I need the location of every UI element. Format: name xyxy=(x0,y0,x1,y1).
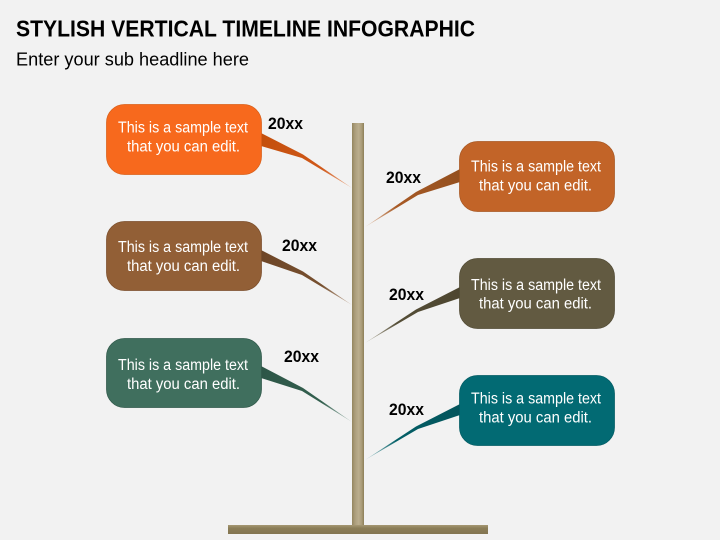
callout text: This is a sample text xyxy=(118,357,249,374)
callout text: that you can edit. xyxy=(479,410,592,426)
milestone 1: orange, left xyxy=(106,104,352,188)
subtitle: Enter your sub headline here xyxy=(16,48,249,70)
callout tail xyxy=(261,366,352,422)
callout text: that you can edit. xyxy=(127,376,240,393)
callout box xyxy=(106,222,262,290)
vertical pole xyxy=(352,123,364,525)
callout text: This is a sample text xyxy=(471,277,602,294)
callout text: that you can edit. xyxy=(127,139,240,156)
callout tail xyxy=(365,287,460,343)
callout text xyxy=(118,120,249,156)
callout text: This is a sample text xyxy=(471,390,602,408)
callout text: that you can edit. xyxy=(479,178,592,194)
callout tail xyxy=(365,169,460,227)
year label: 20xx xyxy=(389,286,425,304)
year label: 20xx xyxy=(386,169,422,187)
callout text xyxy=(471,390,602,426)
callout tail xyxy=(365,404,460,460)
milestone 2: brown, left xyxy=(106,222,352,305)
callout box xyxy=(106,338,262,408)
callout tail xyxy=(261,133,352,188)
callout text: that you can edit. xyxy=(479,296,592,313)
callout box xyxy=(460,258,614,328)
timeline stand xyxy=(228,123,488,534)
year label: 20xx xyxy=(389,401,425,419)
callout text: This is a sample text xyxy=(118,120,249,137)
callout text xyxy=(118,239,249,275)
callout text: that you can edit. xyxy=(127,258,240,275)
year label: 20xx xyxy=(284,348,320,366)
callout tail xyxy=(261,250,352,305)
callout box xyxy=(106,104,262,174)
milestone 4: rust, right xyxy=(365,142,614,227)
base bar xyxy=(228,525,488,534)
title: STYLISH VERTICAL TIMELINE INFOGRAPHIC xyxy=(16,16,475,42)
callout text: This is a sample text xyxy=(471,159,602,176)
callout text xyxy=(471,277,602,313)
milestone 3: green, left xyxy=(106,338,352,422)
milestone 5: olive, right xyxy=(365,258,614,343)
year label: 20xx xyxy=(268,115,304,133)
callout box xyxy=(460,376,614,446)
callout text: This is a sample text xyxy=(118,239,249,256)
year label: 20xx xyxy=(282,237,318,255)
callout text xyxy=(118,357,249,393)
callout box xyxy=(460,142,614,212)
callout text xyxy=(471,159,602,194)
milestone 6: teal, right xyxy=(365,376,614,460)
